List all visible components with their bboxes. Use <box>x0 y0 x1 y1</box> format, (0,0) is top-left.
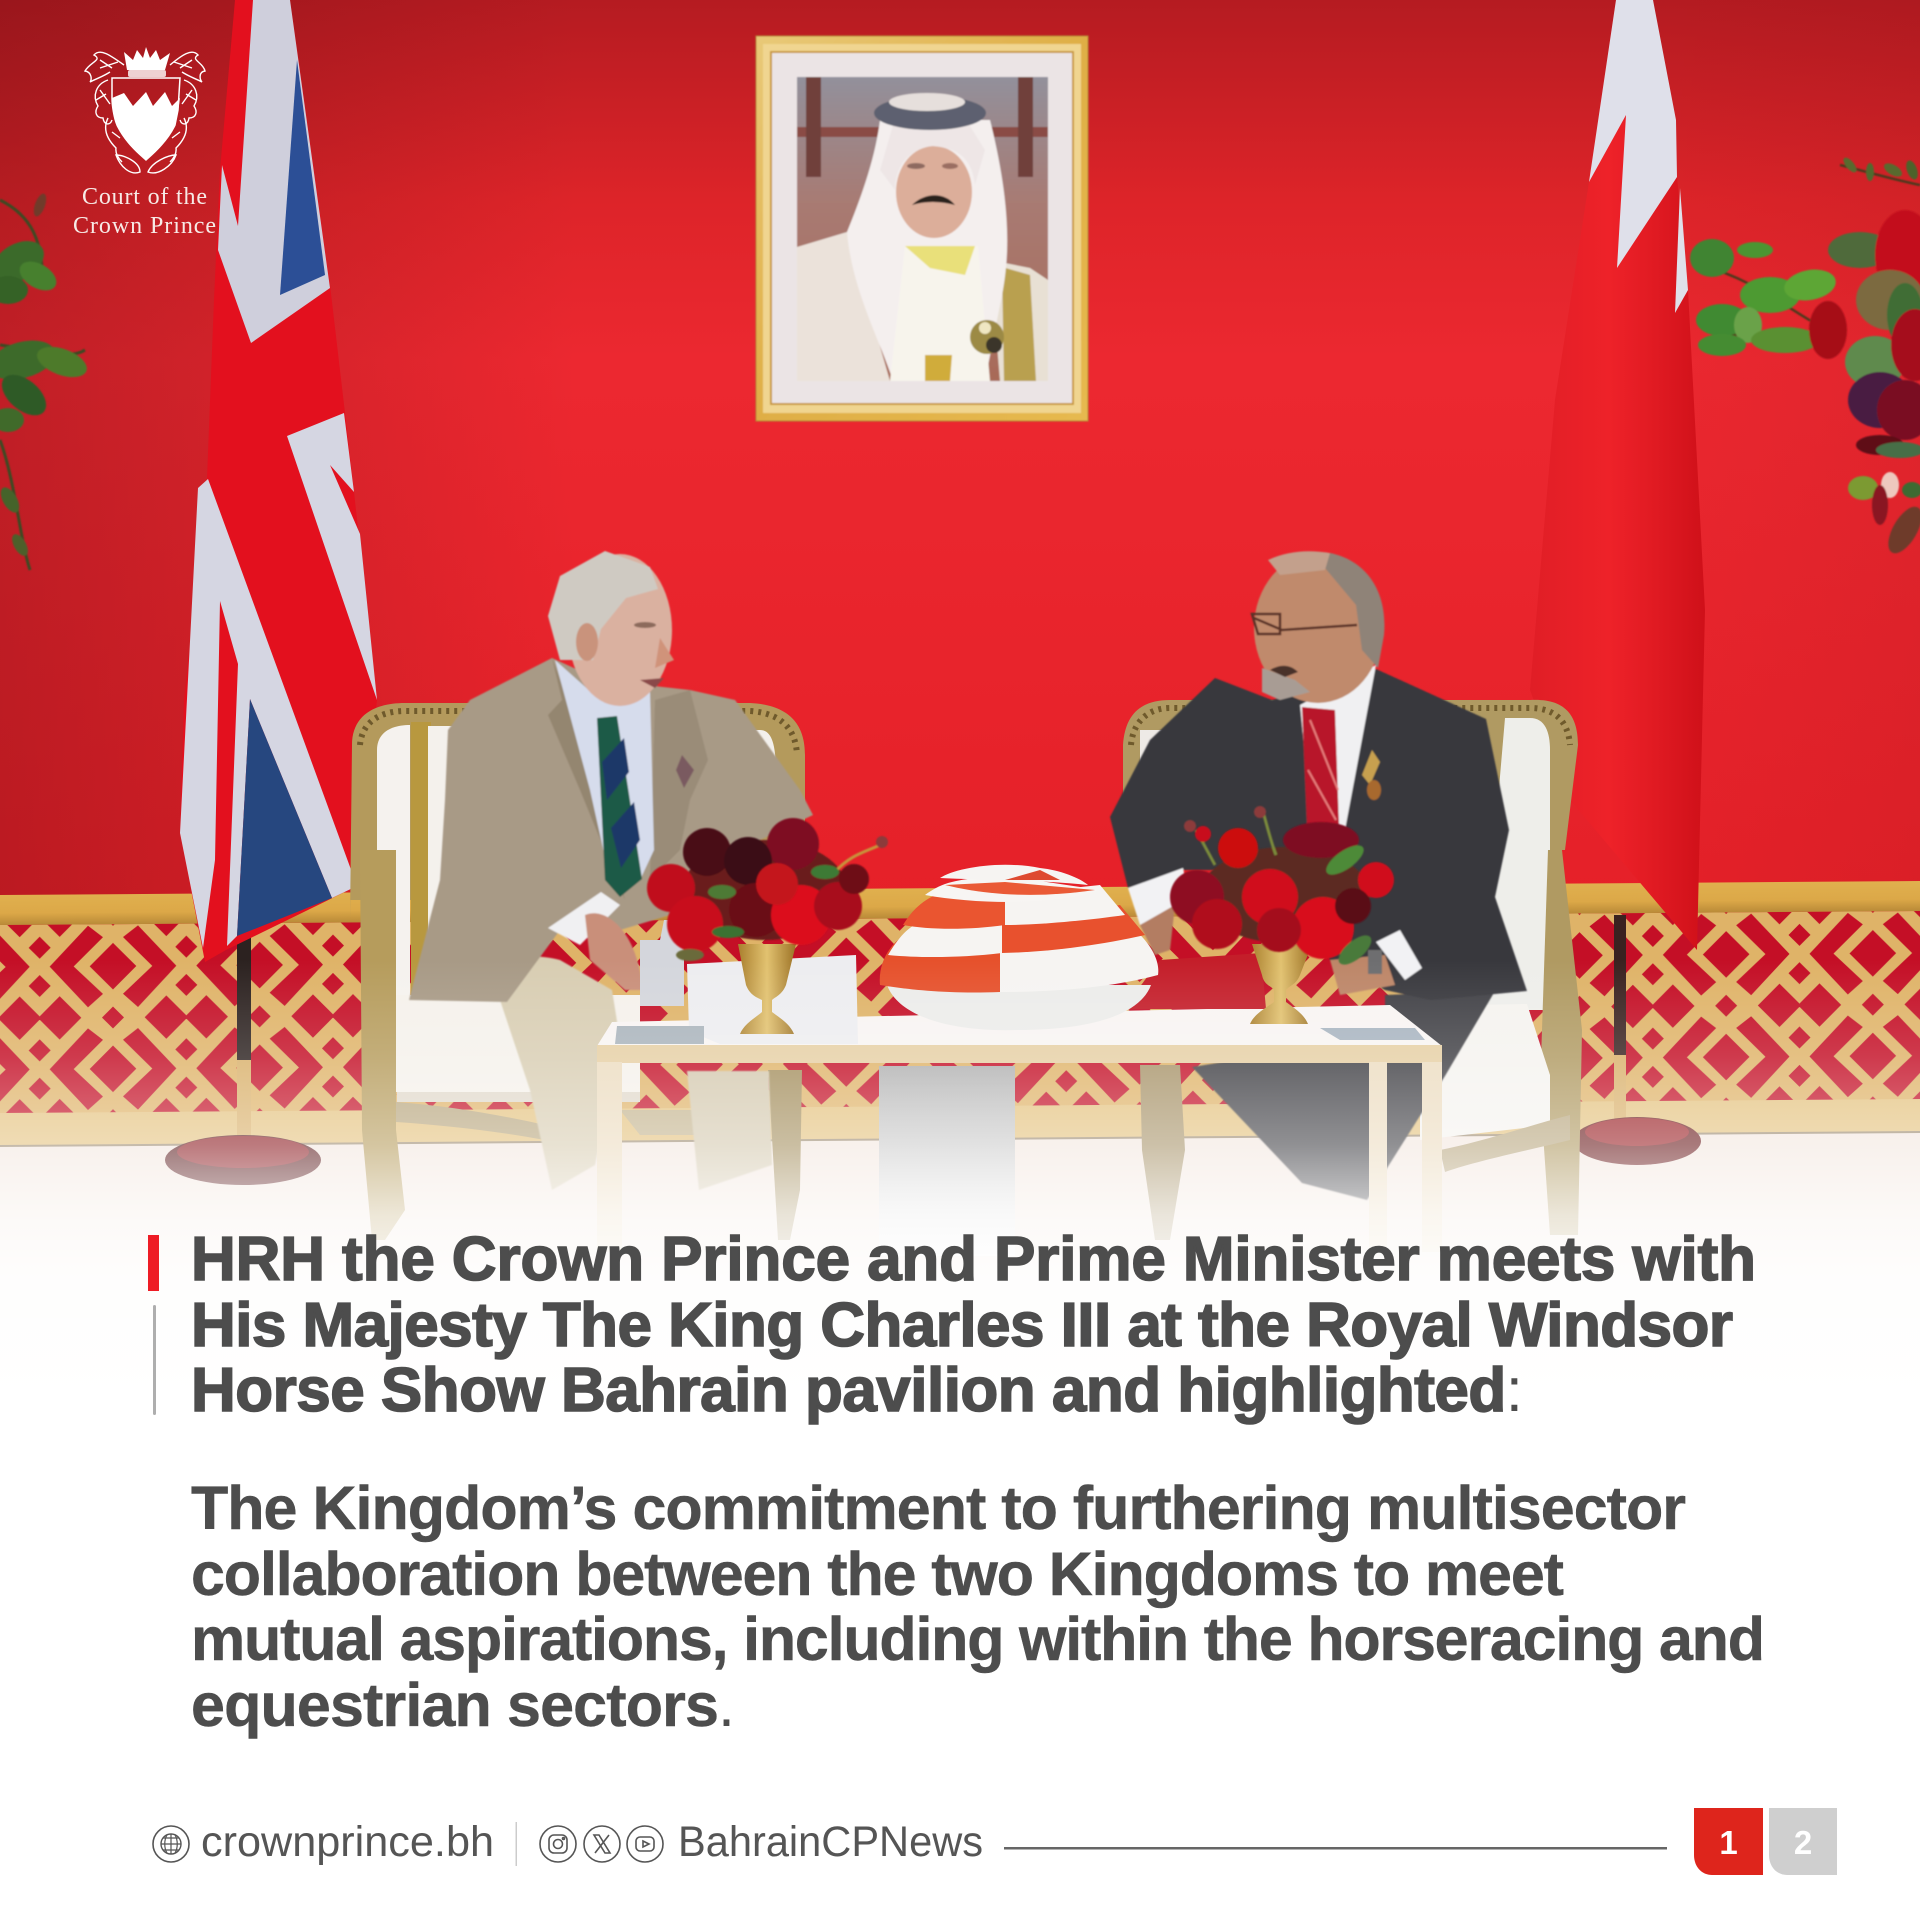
left armchair <box>350 703 805 1240</box>
footer: social handles <box>540 1818 983 1866</box>
trousers <box>1192 991 1495 1200</box>
tie <box>1302 707 1339 826</box>
head <box>1254 553 1382 703</box>
page 1 active <box>1694 1808 1763 1875</box>
page indicator <box>1694 1808 1837 1875</box>
body text <box>191 1474 1765 1739</box>
page 2 inactive <box>1769 1808 1837 1875</box>
medal <box>1362 750 1380 785</box>
HRH the Crown Prince and Prime Minister <box>1110 551 1527 1200</box>
portrait photograph <box>797 77 1048 381</box>
white fade overlay <box>0 960 1920 1400</box>
trousers <box>440 956 620 1190</box>
body text: mutual aspirations, including within the horseracing and <box>191 1605 1765 1673</box>
photo background: red wall <box>0 0 1920 1000</box>
body text: collaboration between the two Kingdoms to meet <box>191 1540 1564 1608</box>
table legs <box>597 1062 622 1252</box>
jacket <box>1110 669 1527 1000</box>
hand <box>585 913 642 990</box>
red gift box <box>1123 953 1266 1009</box>
heading accent bars <box>148 1235 159 1415</box>
pocket square <box>676 755 694 788</box>
shirt <box>1300 665 1376 830</box>
headline text <box>191 1225 1756 1425</box>
cuffs and hands <box>1128 868 1190 925</box>
left plant <box>0 192 91 570</box>
headline text: Horse Show Bahrain pavilion and highlighted: <box>191 1356 1523 1425</box>
Bahrain flag with pole and base <box>1530 0 1705 1165</box>
emblem <box>85 47 205 173</box>
website address: crownprince.bh <box>201 1818 494 1866</box>
left flower vase <box>738 944 796 1034</box>
logo: Court of the Crown Prince <box>73 47 216 239</box>
King Charles III <box>409 551 813 1190</box>
headline text: HRH the Crown Prince and Prime Minister meets with <box>191 1225 1756 1294</box>
icon: instagram <box>540 1826 576 1862</box>
jacket <box>409 658 813 1002</box>
right flower vase <box>1250 944 1312 1024</box>
icon: globe <box>153 1826 189 1862</box>
body text: The Kingdom’s commitment to furthering multisector <box>191 1474 1686 1542</box>
right flowers <box>1170 806 1394 970</box>
table pedestal <box>879 1066 1015 1256</box>
white box <box>687 955 858 1044</box>
portrait mat <box>772 53 1072 403</box>
glasses <box>1252 614 1357 634</box>
logo wordmark: Court of the <box>82 184 207 210</box>
table top <box>597 1005 1442 1046</box>
page 1 active: 1 <box>1719 1824 1738 1861</box>
Bahrain flag cloth <box>1530 0 1705 950</box>
shirt <box>555 660 654 880</box>
footer rule <box>1004 1847 1667 1850</box>
footer divider <box>516 1822 517 1866</box>
tie <box>597 716 642 897</box>
glass bottle <box>640 920 684 1006</box>
booklets <box>615 1026 704 1044</box>
logo: Court of the Crown Prince: Crown Prince <box>73 213 216 239</box>
footer: website <box>153 1818 494 1866</box>
page 2 inactive: 2 <box>1794 1824 1812 1861</box>
icon: YouTube <box>627 1826 663 1862</box>
head <box>568 554 672 706</box>
UK flag with pole and base <box>165 0 377 1185</box>
table with objects <box>597 806 1442 1256</box>
cake bowl <box>880 865 1158 1030</box>
icon: X <box>584 1826 620 1862</box>
UK flag cloth <box>180 0 377 962</box>
right floral arrangement <box>1690 156 1920 559</box>
framed portrait <box>756 36 1088 421</box>
cuff <box>548 892 620 945</box>
social handle: BahrainCPNews <box>678 1818 983 1866</box>
right armchair <box>1123 700 1582 1240</box>
left flowers <box>647 818 888 961</box>
body text: equestrian sectors. <box>191 1671 735 1739</box>
wall trim: gold band, lattice panel, baseboard and floor <box>0 881 1920 1430</box>
headline text: His Majesty The King Charles III at the Royal Windsor <box>191 1291 1733 1360</box>
